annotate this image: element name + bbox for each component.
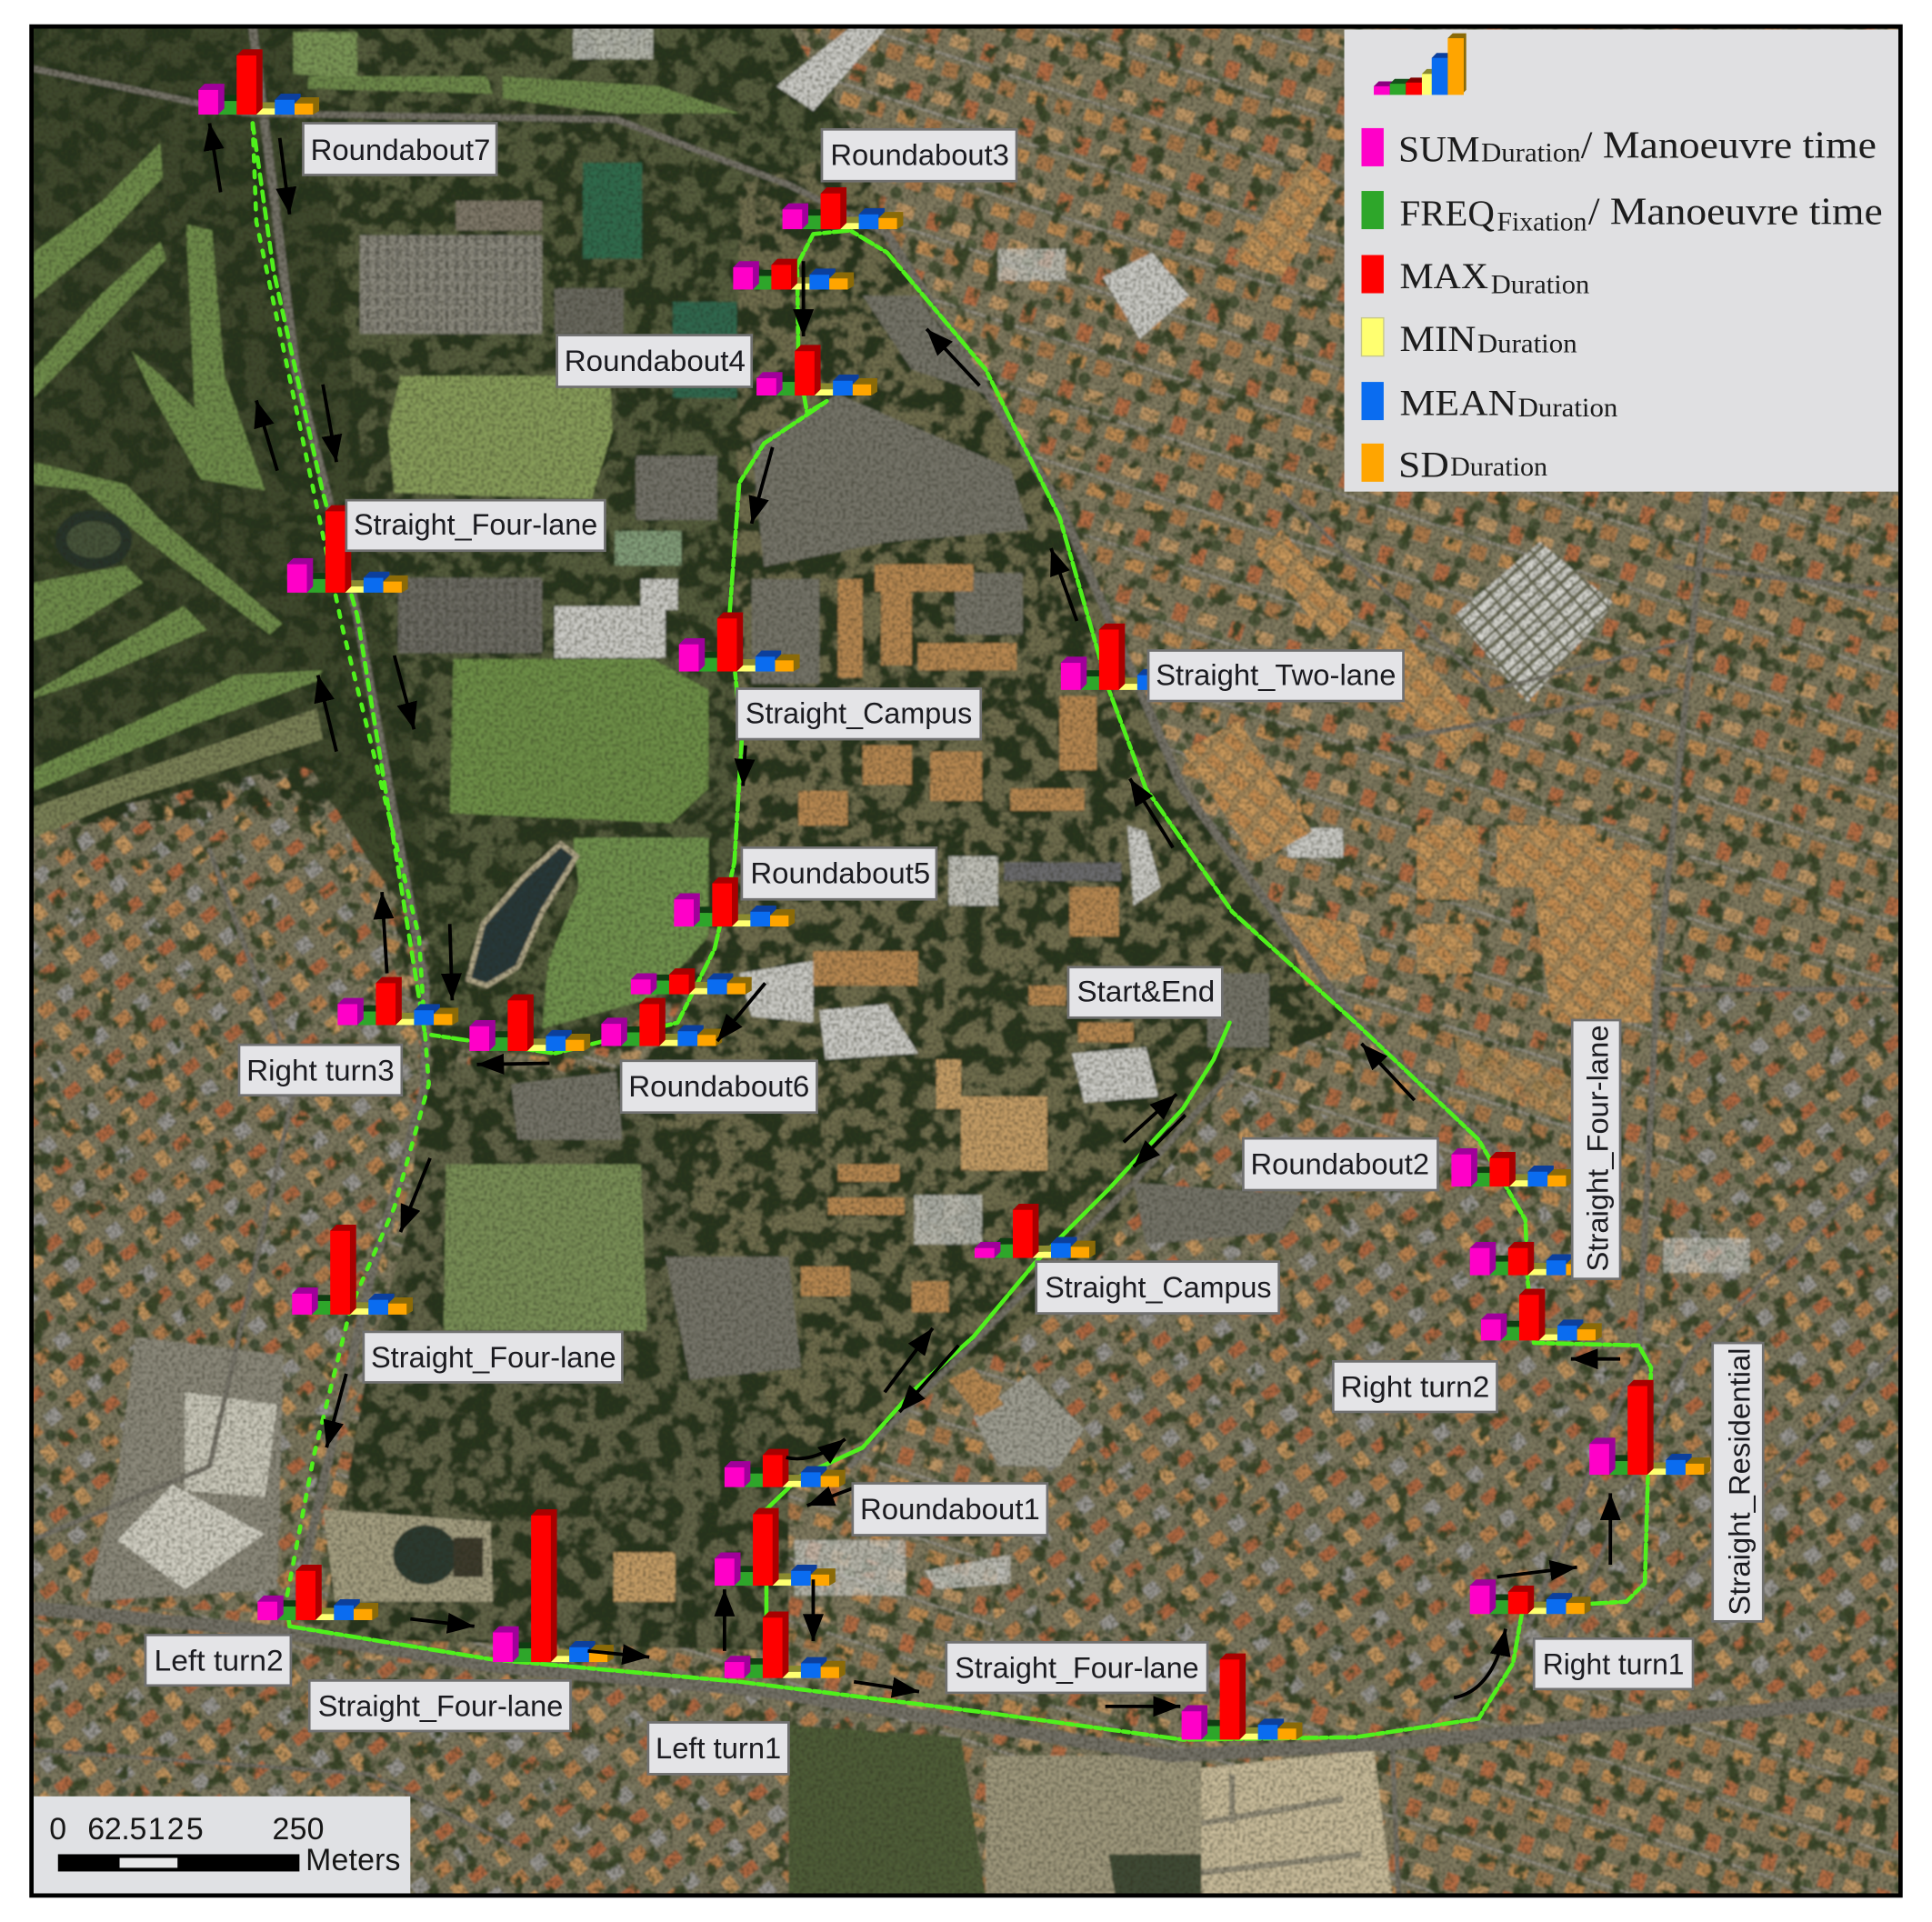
- label: Straight_Four-lane east (vertical): Straight_Four-lane: [1582, 1025, 1615, 1271]
- chart: Roundabout1 lower: [715, 1508, 836, 1586]
- label: Right turn1: Right turn1: [1543, 1648, 1685, 1681]
- arrow: [1051, 548, 1076, 621]
- chart: Roundabout6 lower: [601, 998, 722, 1046]
- legend item: SD: [1361, 444, 1547, 485]
- arrow: [326, 1374, 346, 1447]
- legend icon: stepped bars: [1374, 34, 1467, 95]
- label: Straight_Four-lane east (vertical): [1572, 1020, 1620, 1279]
- chart: Roundabout1 upper: [725, 1449, 846, 1487]
- arrow: [752, 447, 773, 524]
- arrow: [256, 400, 277, 471]
- shopping centre: [86, 1336, 284, 1602]
- label: Straight_Two-lane: [1148, 651, 1404, 701]
- label: Roundabout5: [742, 847, 936, 899]
- arrow: [1106, 1705, 1180, 1707]
- legend item: MEAN: [1361, 382, 1617, 424]
- arrow: [786, 1439, 846, 1458]
- legend item: FREQ: / Manoeuvre time: [1588, 192, 1883, 234]
- label: Roundabout4: Roundabout4: [565, 345, 746, 377]
- chart: Left turn2: [257, 1565, 378, 1620]
- arrow: [450, 924, 452, 1000]
- label: Roundabout5: Roundabout5: [750, 857, 930, 890]
- chart: Straight_Four-lane south: [493, 1509, 614, 1662]
- label: Roundabout2: [1243, 1138, 1438, 1190]
- arrow: [1134, 1115, 1186, 1166]
- arrow: [395, 656, 414, 729]
- legend item: MIN: Duration: [1477, 329, 1577, 359]
- legend item: FREQ: FREQ: [1400, 193, 1495, 234]
- label: Straight_Four-lane south: [309, 1680, 571, 1731]
- label: Roundabout3: [822, 129, 1016, 181]
- label: Start&End: [1068, 967, 1222, 1017]
- arrow: [477, 1063, 549, 1065]
- arrow: [743, 746, 746, 786]
- legend item: MEAN: Duration: [1518, 393, 1617, 423]
- label: Roundabout4: [557, 335, 752, 387]
- arrow: [318, 676, 336, 752]
- legend item: SD: Duration: [1450, 452, 1547, 482]
- south ponds and sandy ground: [323, 1509, 493, 1602]
- arrow: [723, 1589, 726, 1651]
- arrow: [1454, 1628, 1506, 1697]
- chart: approach to Roundabout4: [733, 259, 854, 289]
- arrow: [400, 1158, 430, 1232]
- scale bar: [32, 1797, 410, 1895]
- legend item: MIN: [1361, 318, 1577, 359]
- label: Roundabout1: Roundabout1: [860, 1493, 1040, 1526]
- label: Roundabout6: Roundabout6: [628, 1070, 809, 1103]
- chart: Straight_Campus north: [679, 612, 800, 672]
- legend item: SUM: SUM: [1398, 129, 1480, 170]
- arrow: [1130, 778, 1173, 847]
- legend item: MAX: Duration: [1491, 270, 1589, 300]
- label: Straight_Four-lane south: Straight_Four-lane: [318, 1690, 563, 1723]
- label: Roundabout3: Roundabout3: [830, 139, 1009, 172]
- label: Right turn3: [239, 1045, 402, 1096]
- legend item: SUM: / Manoeuvre time: [1581, 125, 1877, 166]
- scale bar: Meters: [305, 1843, 400, 1877]
- arrow: [410, 1619, 475, 1627]
- green zones: [30, 25, 1356, 1651]
- scale bar: 0: [49, 1812, 66, 1847]
- chart: Right turn1: [1470, 1579, 1591, 1614]
- arrow: [1609, 1493, 1612, 1565]
- chart: Straight_Residential: [1589, 1380, 1710, 1475]
- direction arrows: [209, 124, 1620, 1707]
- arrow: [1497, 1567, 1577, 1577]
- chart: Straight_Campus south: [975, 1204, 1096, 1258]
- legend panel: [1345, 30, 1900, 492]
- arrow: [1124, 1094, 1176, 1142]
- legend item: FREQ: [1361, 191, 1883, 236]
- legend item: SD: SD: [1398, 444, 1449, 485]
- label: Straight_Campus north: Straight_Campus: [746, 696, 972, 729]
- south-east park and development site: [788, 1725, 986, 1895]
- arrow: [812, 1579, 815, 1641]
- label: Right turn3: Right turn3: [246, 1054, 395, 1086]
- legend item: SUM: Duration: [1481, 138, 1581, 168]
- chart: Straight_Four-lane south-east: [1182, 1654, 1302, 1739]
- arrow: [807, 1488, 853, 1506]
- arrow: [926, 329, 979, 385]
- label: Straight_Campus north: [736, 689, 981, 739]
- label: Right turn2: [1333, 1361, 1497, 1412]
- label: Straight_Residential (vertical): Straight_Residential: [1723, 1348, 1756, 1616]
- label: Straight_Four-lane north: Straight_Four-lane: [354, 508, 597, 541]
- legend item: MAX: [1361, 255, 1589, 300]
- arrow: [717, 983, 766, 1041]
- label: Straight_Four-lane south-east: Straight_Four-lane: [955, 1652, 1199, 1685]
- legend item: FREQ: Fixation: [1497, 206, 1587, 236]
- arrow: [323, 385, 336, 462]
- label: Roundabout2: Roundabout2: [1251, 1147, 1429, 1180]
- label: Right turn2: Right turn2: [1340, 1371, 1489, 1404]
- campus buildings: [776, 27, 887, 111]
- chart: Straight_Four-lane north: [287, 506, 408, 593]
- label: Straight_Four-lane south-east: [946, 1642, 1207, 1693]
- chart: Roundabout4: [756, 345, 877, 395]
- label: Straight_Campus south: [1036, 1262, 1279, 1314]
- label: Roundabout7: [303, 124, 496, 175]
- arrow: [280, 138, 290, 215]
- chart: Left turn1: [725, 1612, 846, 1678]
- chart: after Right turn3: [469, 995, 590, 1051]
- legend item: MIN: MIN: [1400, 318, 1477, 359]
- label: Left turn1: Left turn1: [656, 1732, 781, 1765]
- legend item: SUM: [1361, 125, 1877, 170]
- label: Left turn1: [648, 1722, 788, 1774]
- label: Straight_Two-lane: Straight_Two-lane: [1156, 658, 1396, 691]
- arrow: [802, 261, 805, 336]
- bar charts along the route: [198, 49, 1710, 1739]
- residential complexes: [1183, 721, 1312, 863]
- arrow: [1571, 1357, 1620, 1360]
- chart: Roundabout3: [783, 187, 903, 229]
- arrow: [854, 1682, 919, 1692]
- arrow: [885, 1328, 933, 1392]
- label: Straight_Four-lane north: [346, 500, 605, 551]
- arrow: [209, 124, 221, 192]
- chart: Roundabout6 upper: [631, 968, 752, 995]
- label: Roundabout1: [853, 1484, 1047, 1535]
- sports fields: [294, 32, 357, 79]
- arrow: [899, 1346, 958, 1412]
- golf fairways: [34, 143, 323, 791]
- chart: Right turn2: [1481, 1288, 1602, 1340]
- label: Right turn1: [1534, 1638, 1693, 1689]
- label: Roundabout7: Roundabout7: [311, 134, 490, 166]
- label: Left turn2: Left turn2: [154, 1645, 284, 1677]
- label: Start&End: Start&End: [1076, 976, 1215, 1008]
- label: Straight_Residential (vertical): [1713, 1343, 1763, 1621]
- scale bar: 250: [273, 1812, 324, 1847]
- car parks: [360, 235, 542, 334]
- chart: Straight_Four-lane east: [1470, 1242, 1591, 1276]
- chart: Right turn3: [337, 977, 458, 1025]
- label: Left turn2: [145, 1635, 291, 1686]
- scale bar: 62.5: [87, 1812, 146, 1847]
- legend item: MAX: MAX: [1400, 255, 1488, 296]
- location labels: [145, 124, 1763, 1774]
- chart: Straight_Four-lane west: [292, 1225, 413, 1315]
- scale bar: 125: [148, 1812, 204, 1847]
- chart: Roundabout5: [674, 877, 795, 926]
- arrow: [587, 1651, 649, 1657]
- chart: Straight_Two-lane: [1061, 624, 1182, 690]
- label: Straight_Four-lane west: [364, 1332, 622, 1382]
- chart: Roundabout2: [1451, 1148, 1572, 1186]
- arrow: [382, 892, 387, 974]
- legend item: MEAN: MEAN: [1400, 383, 1517, 424]
- arrow: [1361, 1044, 1415, 1100]
- chart: Roundabout7: [198, 49, 319, 115]
- label: Straight_Campus south: Straight_Campus: [1045, 1271, 1272, 1304]
- label: Roundabout6: [621, 1061, 817, 1113]
- driving route line: [253, 124, 1651, 1739]
- label: Straight_Four-lane west: Straight_Four-lane: [371, 1341, 616, 1374]
